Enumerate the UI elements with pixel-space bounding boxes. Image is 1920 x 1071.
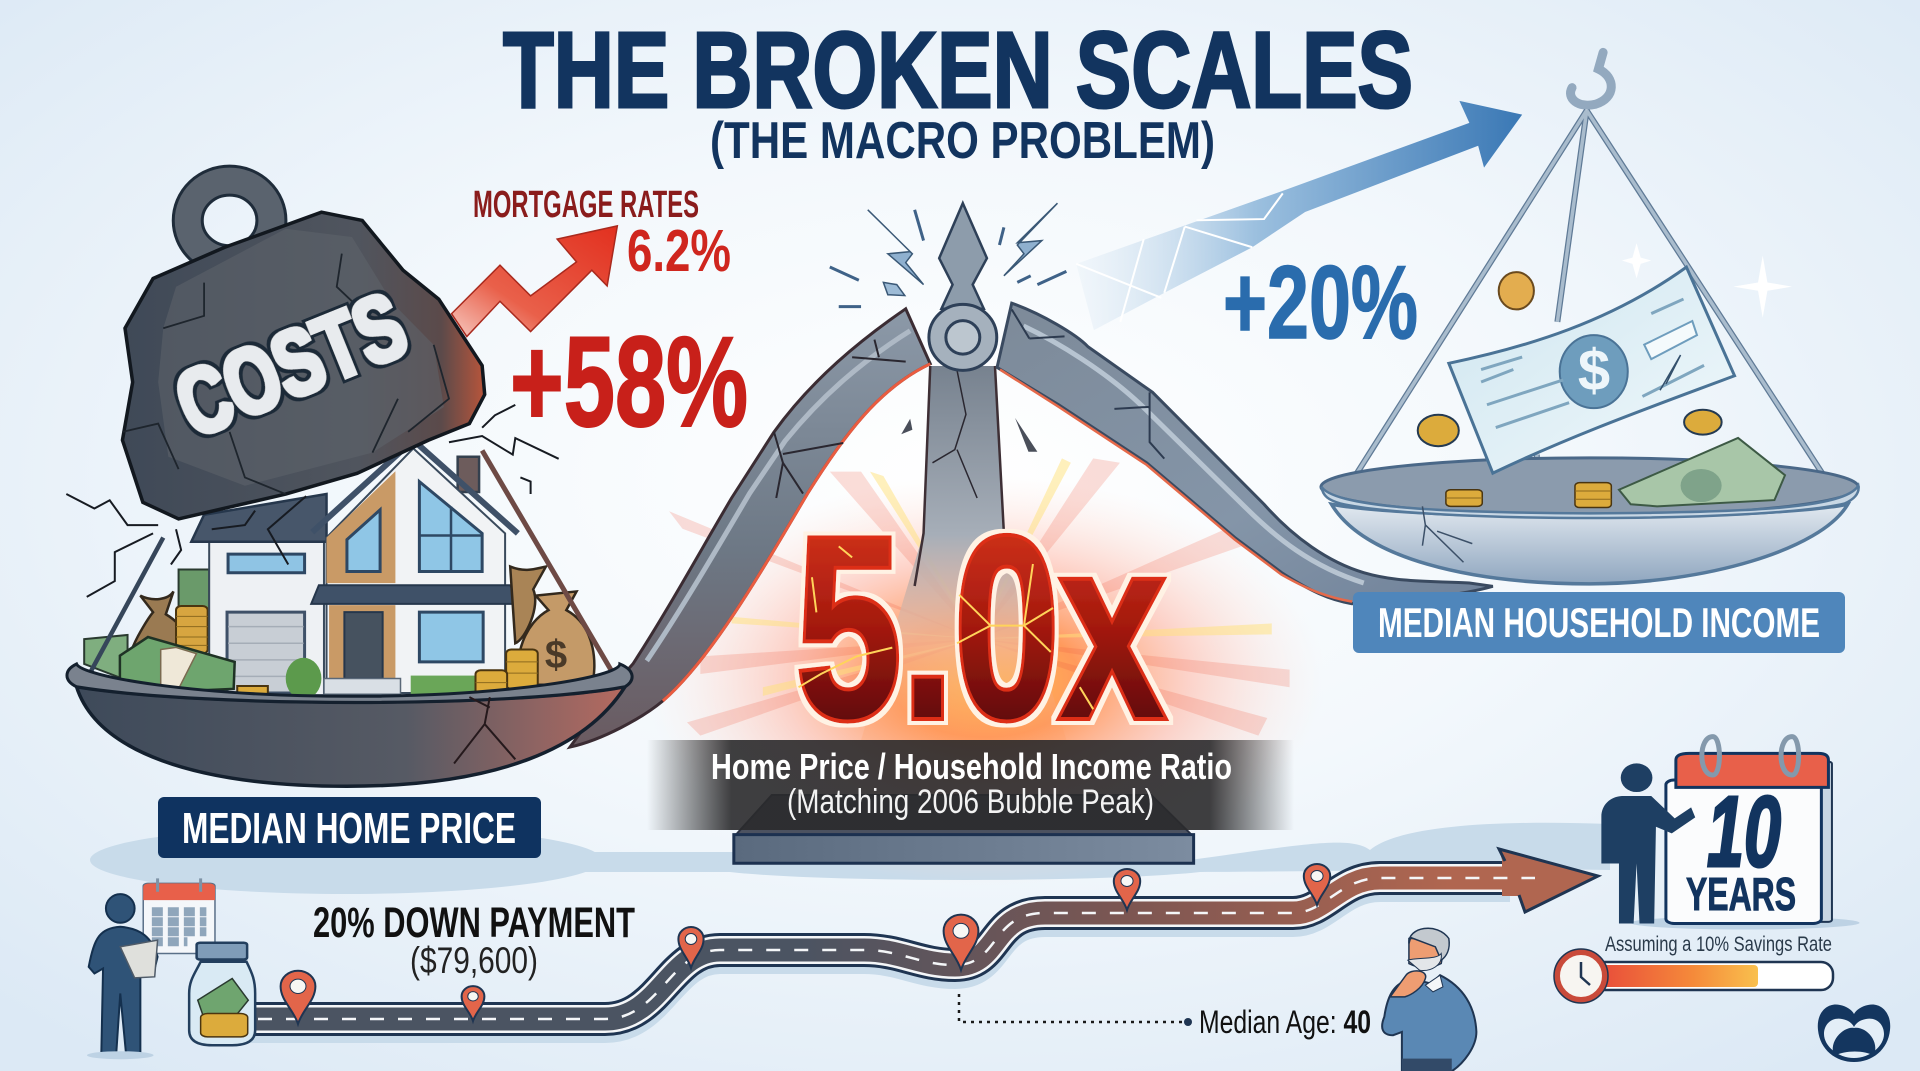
- left arm: [570, 309, 930, 747]
- label: median home price: MEDIAN HOME PRICE: [182, 804, 516, 853]
- bushes: [286, 658, 321, 699]
- calendar: [143, 878, 215, 953]
- floating coins: [1499, 272, 1534, 309]
- scale strings: [89, 538, 163, 674]
- pivot and spike with sparks: [830, 203, 1066, 452]
- paycheck dollar symbol: $: [1578, 338, 1610, 403]
- right money bags: [510, 567, 546, 643]
- stat: +58%: +58%: [510, 311, 748, 454]
- older man thinking: [1382, 928, 1476, 1071]
- calendar unit: years: YEARS: [1686, 868, 1796, 920]
- dollar sign on money bag: $: [545, 633, 567, 677]
- weight label: COSTS: [162, 272, 420, 457]
- ground shadows: [90, 823, 1610, 894]
- icon: rising blue arrow: [1076, 101, 1522, 330]
- label: down payment amount: ($79,600): [410, 940, 538, 981]
- rock weight: [122, 212, 485, 519]
- pan bowl: [1331, 504, 1848, 584]
- coins left: [176, 606, 208, 654]
- cash stack left: [84, 635, 128, 681]
- stat: 6.2%: 6.2%: [627, 218, 731, 284]
- explosion glow: [645, 458, 1325, 885]
- ring of weight: [188, 181, 271, 260]
- label: median household income: [1353, 592, 1845, 653]
- strings: [1349, 110, 1830, 486]
- label: median age: Median Age: 40: [1199, 1004, 1371, 1040]
- label: mortgage rates: MORTGAGE RATES: [473, 184, 699, 226]
- money bag left: [133, 591, 187, 664]
- pan rim: [67, 664, 632, 702]
- person with ten year calendar: [1601, 737, 1860, 929]
- pan bowl: [77, 687, 625, 786]
- right light pan with paycheck: [1321, 52, 1859, 584]
- gabled wing: [327, 448, 505, 693]
- label: 20% down payment: 20% DOWN PAYMENT: [313, 899, 635, 947]
- broken beam: [570, 303, 1493, 747]
- person with calendar, clipboard and savings jar: [87, 878, 255, 1059]
- map pins: [281, 864, 1330, 1024]
- big ratio: 5.0x: 5.0x: [796, 483, 1166, 772]
- label: savings rate: Assuming a 10% Savings Rate: [1605, 933, 1832, 956]
- plinth top: [736, 795, 1191, 835]
- road to homeownership: [250, 849, 1598, 1026]
- impact cracks: [66, 405, 559, 597]
- dotted leader to median age: [959, 994, 1192, 1026]
- savings jar: [189, 943, 255, 1045]
- logo: [1818, 1004, 1890, 1062]
- caption band: [647, 740, 1294, 830]
- subtitle: (THE MACRO PROBLEM): [710, 112, 1215, 170]
- arrow head: [1499, 849, 1598, 912]
- progress bar with clock: [1554, 949, 1833, 1003]
- coins and bills in pan: [1446, 490, 1482, 506]
- cash stack back: [179, 569, 209, 615]
- chimney: [458, 457, 479, 492]
- pan back: [1321, 458, 1858, 516]
- title: THE BROKEN SCALES: [503, 9, 1413, 130]
- calendar back pages: [1810, 762, 1832, 922]
- roof left: [191, 494, 327, 542]
- icon: rising red arrow: [452, 226, 617, 337]
- garage wing: [209, 542, 324, 695]
- cash bundle: [120, 637, 235, 691]
- coin stacks right: [506, 649, 538, 689]
- caption band: Home Price / Household Income Ratio: [711, 746, 1232, 787]
- stat: +20%: +20%: [1223, 245, 1418, 361]
- plinth slab: [734, 835, 1194, 863]
- central pole and base: [734, 366, 1194, 863]
- person: [1621, 763, 1652, 792]
- left cracked pan with house and cost weight: [66, 181, 632, 786]
- calendar page: [1666, 780, 1821, 923]
- right arm: [997, 303, 1493, 604]
- calendar number: 10: 10: [1707, 776, 1781, 888]
- paycheck: [1449, 267, 1735, 473]
- caption band: (Matching 2006 Bubble Peak): [787, 783, 1154, 821]
- person: [87, 894, 158, 1059]
- pole: [861, 366, 1066, 740]
- hook: [1571, 52, 1611, 105]
- label: median home price: [158, 797, 541, 858]
- sparkles: [1622, 243, 1792, 318]
